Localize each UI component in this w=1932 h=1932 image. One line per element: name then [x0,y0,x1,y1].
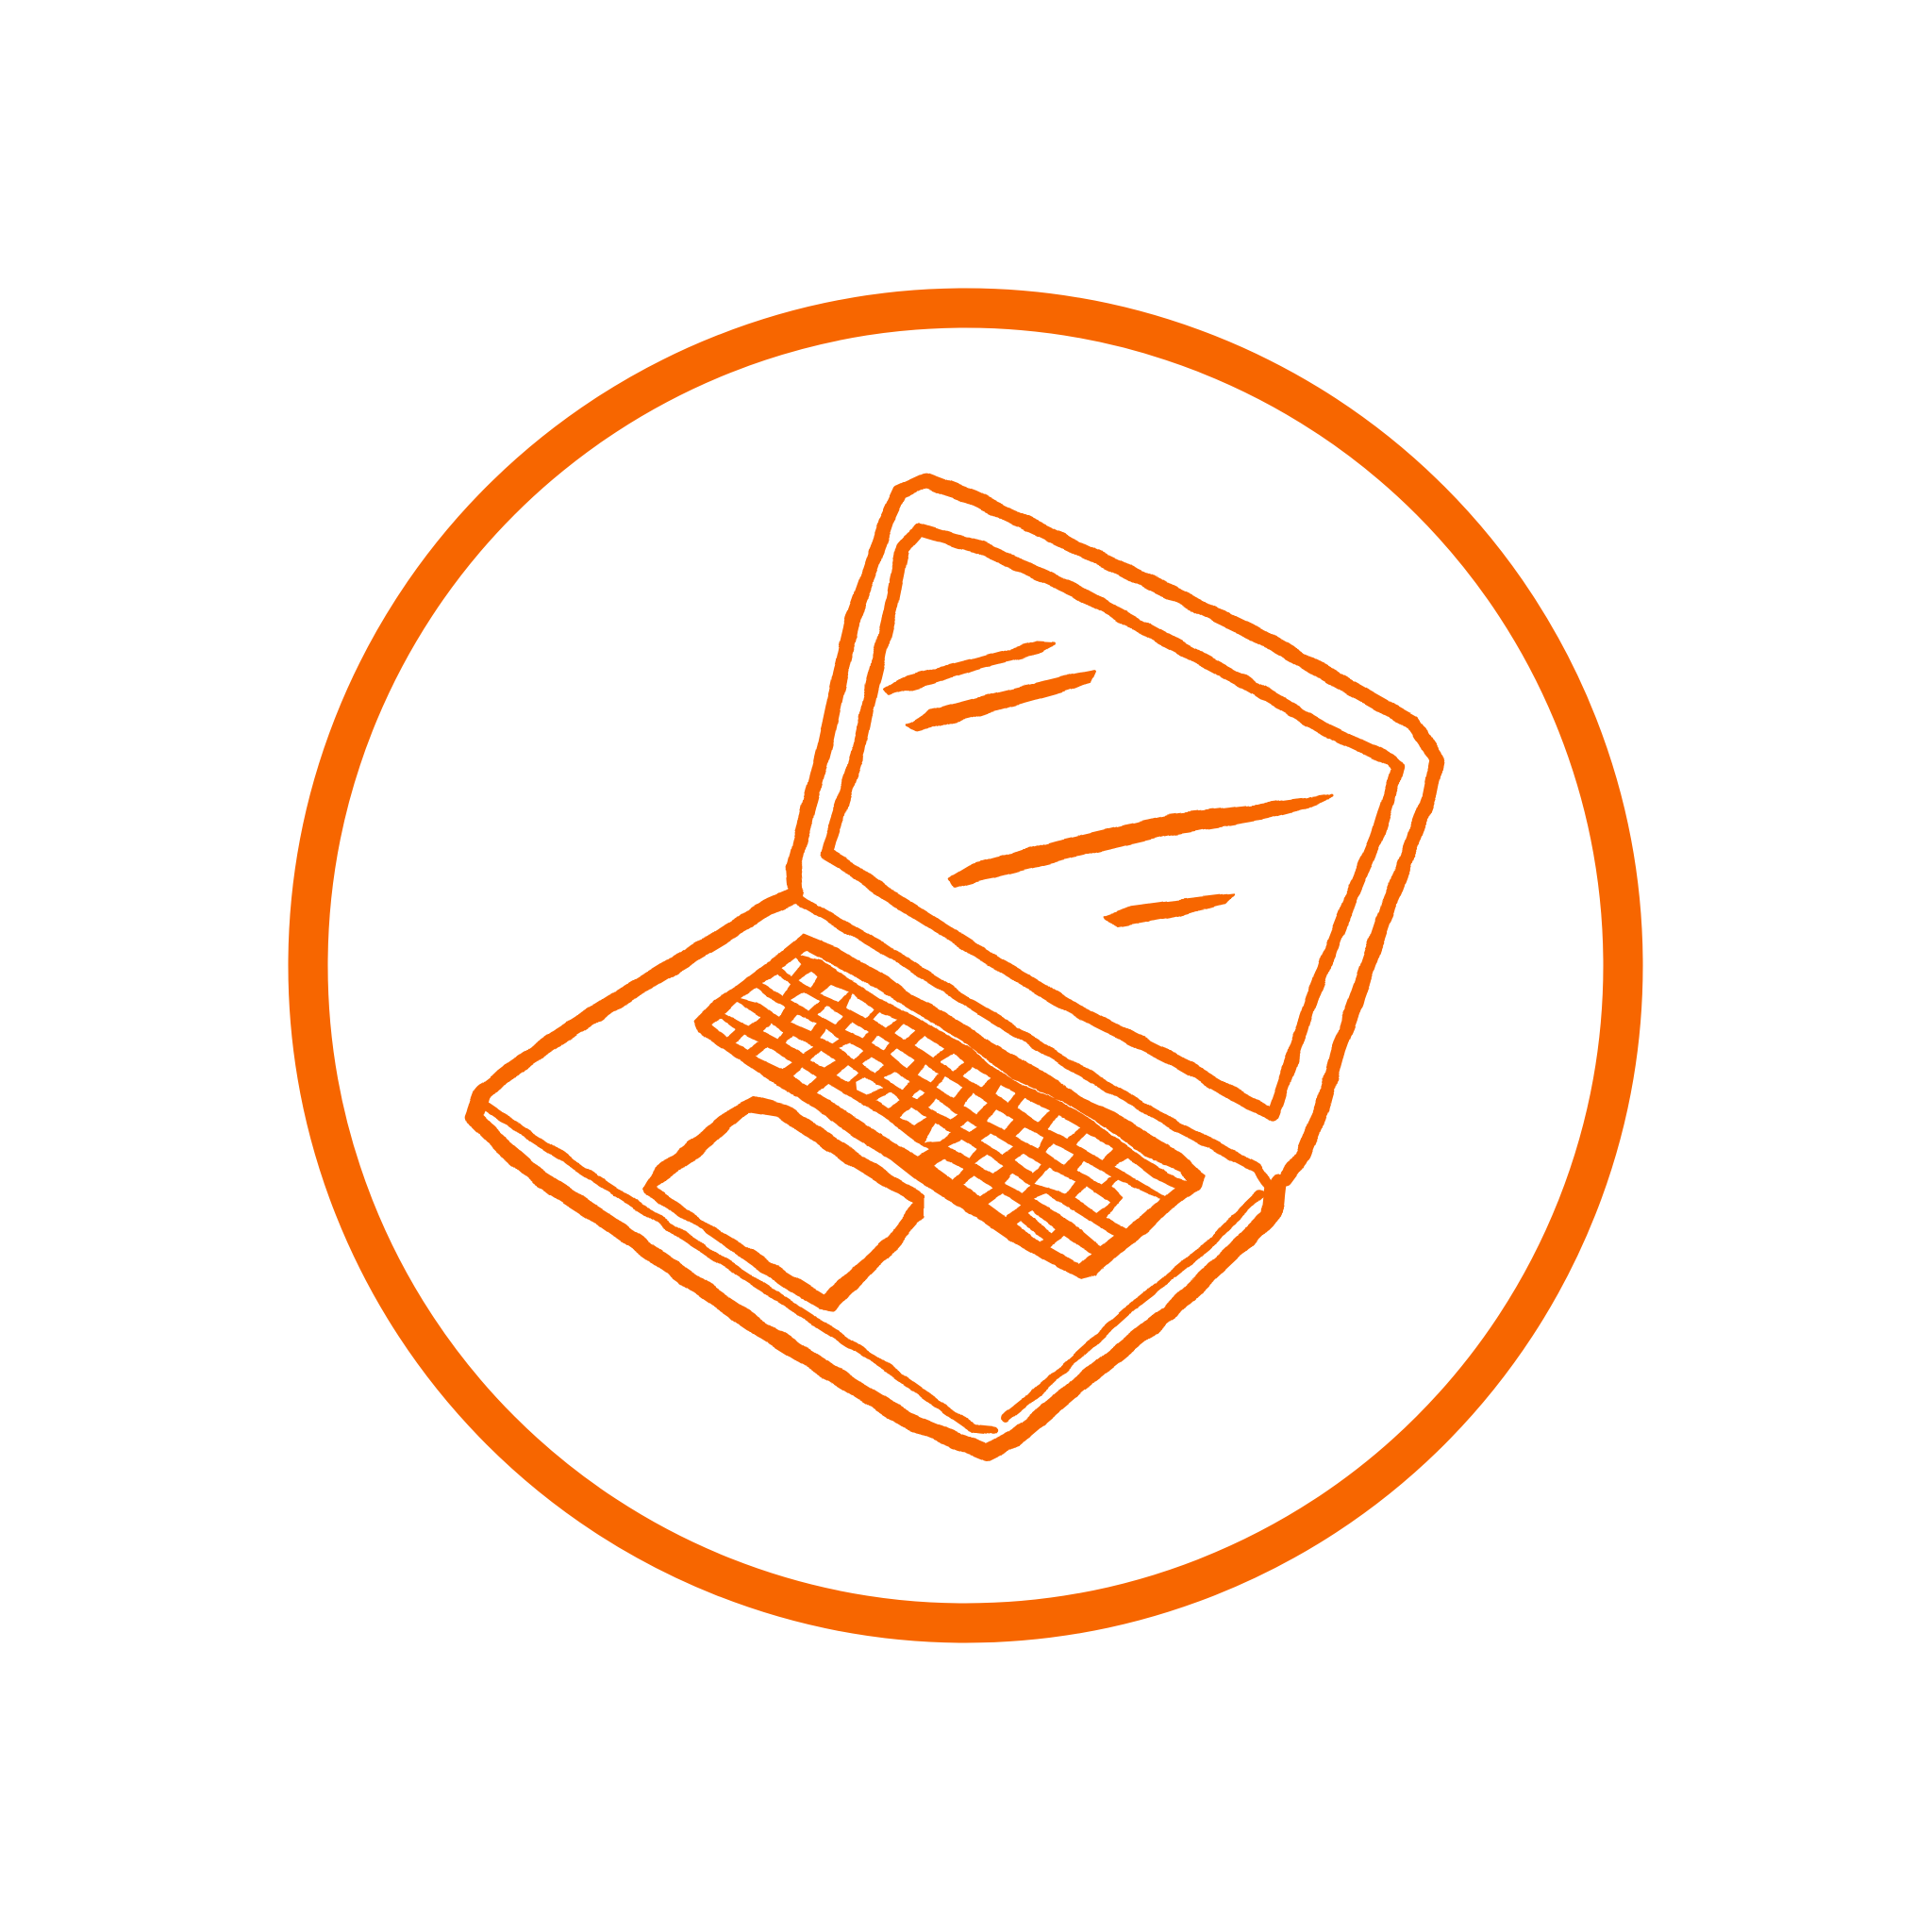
laptop lid outline [793,480,1437,1179]
touchpad [642,1095,924,1311]
hinge edge of base [798,900,1269,1236]
keys [711,951,1187,1264]
right inner edge line [1006,1194,1259,1418]
keyboard [695,935,1203,1277]
laptop [474,480,1437,1453]
front inner edge line [486,1106,994,1430]
laptop base outline [474,896,1278,1453]
screen scribble lines [885,642,1332,926]
screen bezel [826,529,1398,1115]
keyboard body [695,935,1203,1277]
ring [308,308,1623,1623]
